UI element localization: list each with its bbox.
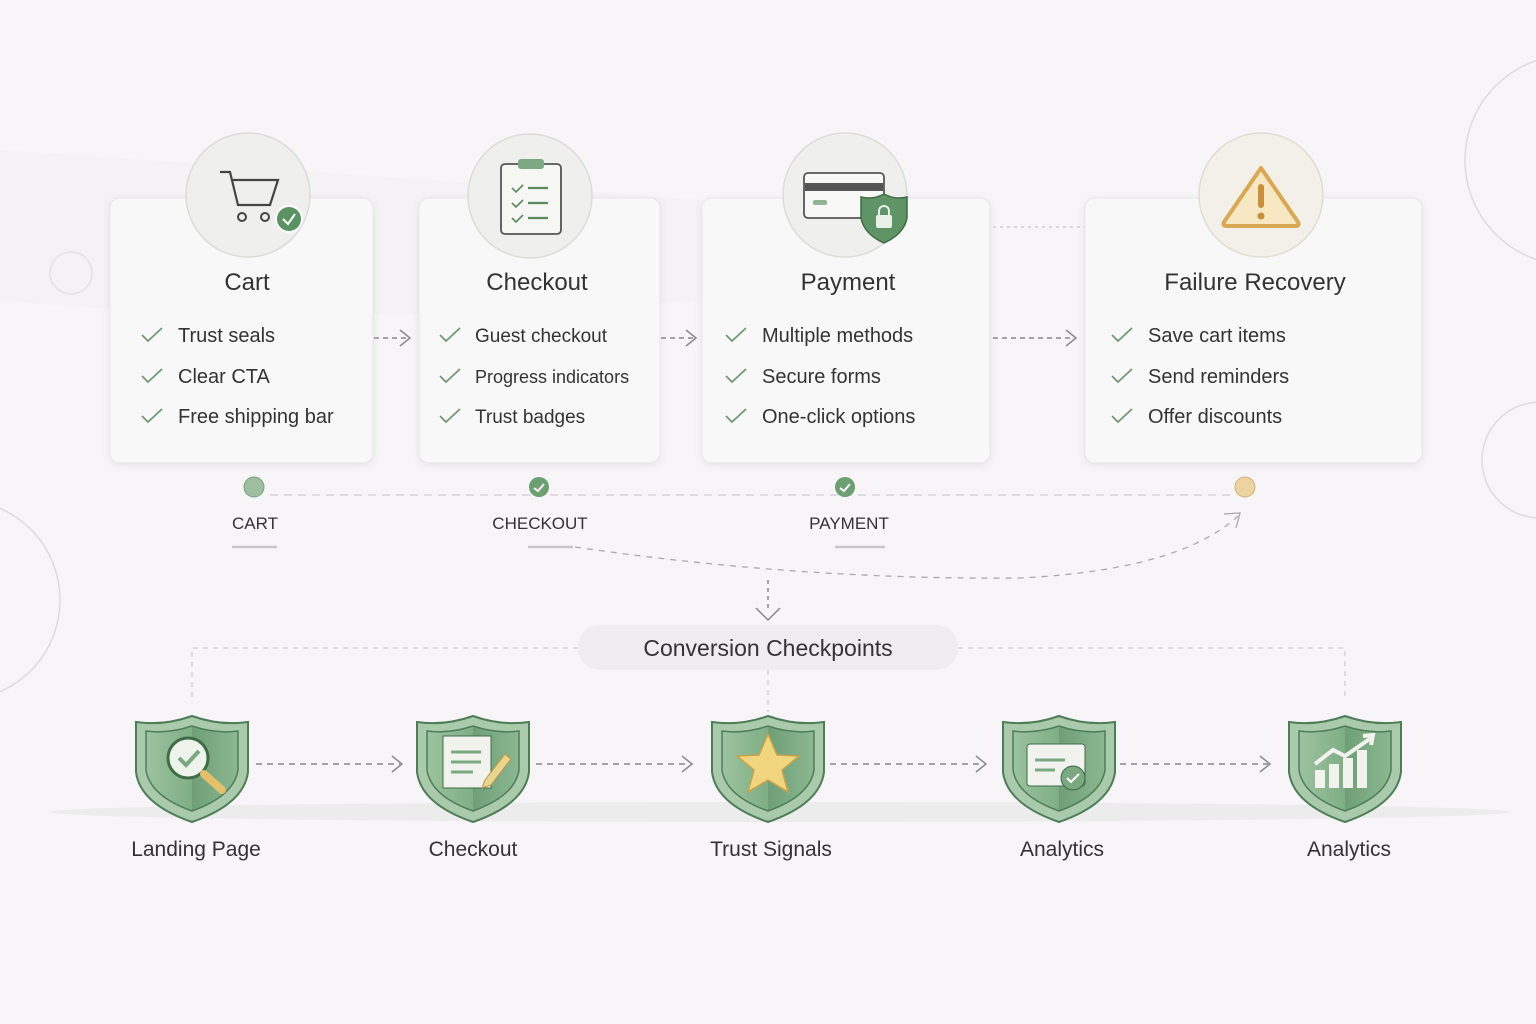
list: cart items: Trust seals <box>178 325 275 347</box>
card: Failure Recovery <box>1085 133 1422 463</box>
down arrow <box>756 580 780 620</box>
list: recovery items <box>1112 325 1289 428</box>
icon: cart <box>186 133 310 257</box>
list: payment items: Multiple methods <box>762 325 913 347</box>
pill: Conversion Checkpoints: Conversion Checkpoints <box>643 635 893 661</box>
card: Checkout <box>419 134 660 463</box>
connector lines <box>192 648 1345 712</box>
shield labels: Landing Page <box>131 838 261 861</box>
title: Failure Recovery: Failure Recovery <box>1164 269 1346 296</box>
card: Payment <box>702 133 990 463</box>
list: recovery items: Send reminders <box>1148 366 1289 388</box>
title: Cart: Cart <box>224 269 270 296</box>
shield: Checkout <box>417 716 529 822</box>
list: payment items: One-click options <box>762 406 915 428</box>
shield: Trust Signals <box>712 716 824 822</box>
icon: card with lock <box>783 133 907 257</box>
shield: Analytics 1 <box>1003 716 1115 822</box>
timeline: PAYMENT <box>809 514 889 533</box>
list: payment items: Secure forms <box>762 366 881 388</box>
list: payment items <box>726 325 915 428</box>
list: cart items: Free shipping bar <box>178 406 334 428</box>
arrow <box>993 227 1085 346</box>
shield labels: Checkout <box>429 838 518 861</box>
ground shadow <box>50 802 1510 822</box>
shield labels: Analytics <box>1307 838 1391 861</box>
icon: warning <box>1199 133 1323 257</box>
arrow <box>661 330 696 346</box>
timeline: CART <box>232 514 278 533</box>
shield labels: Trust Signals <box>710 838 832 861</box>
pill: Conversion Checkpoints <box>578 625 958 670</box>
card: Cart <box>110 133 373 463</box>
list: checkout items <box>440 326 629 428</box>
shield labels <box>131 838 1391 861</box>
list: checkout items: Guest checkout <box>475 326 608 347</box>
shield: Analytics 2 <box>1289 716 1401 822</box>
list: checkout items: Progress indicators <box>475 367 629 387</box>
shield: Landing Page <box>136 716 248 822</box>
list: recovery items: Offer discounts <box>1148 406 1282 428</box>
shield arrows <box>256 756 1270 772</box>
icon: clipboard <box>468 134 592 258</box>
list: cart items <box>142 325 334 428</box>
title: Payment: Payment <box>801 269 896 296</box>
list: checkout items: Trust badges <box>475 407 585 428</box>
list: recovery items: Save cart items <box>1148 325 1286 347</box>
shield labels: Analytics <box>1020 838 1104 861</box>
title: Checkout: Checkout <box>486 269 588 296</box>
curved arrow <box>575 513 1240 578</box>
list: cart items: Clear CTA <box>178 366 271 388</box>
arrow <box>374 330 410 346</box>
timeline: CHECKOUT <box>492 514 588 533</box>
background shapes <box>0 55 1536 700</box>
timeline <box>232 477 1255 547</box>
